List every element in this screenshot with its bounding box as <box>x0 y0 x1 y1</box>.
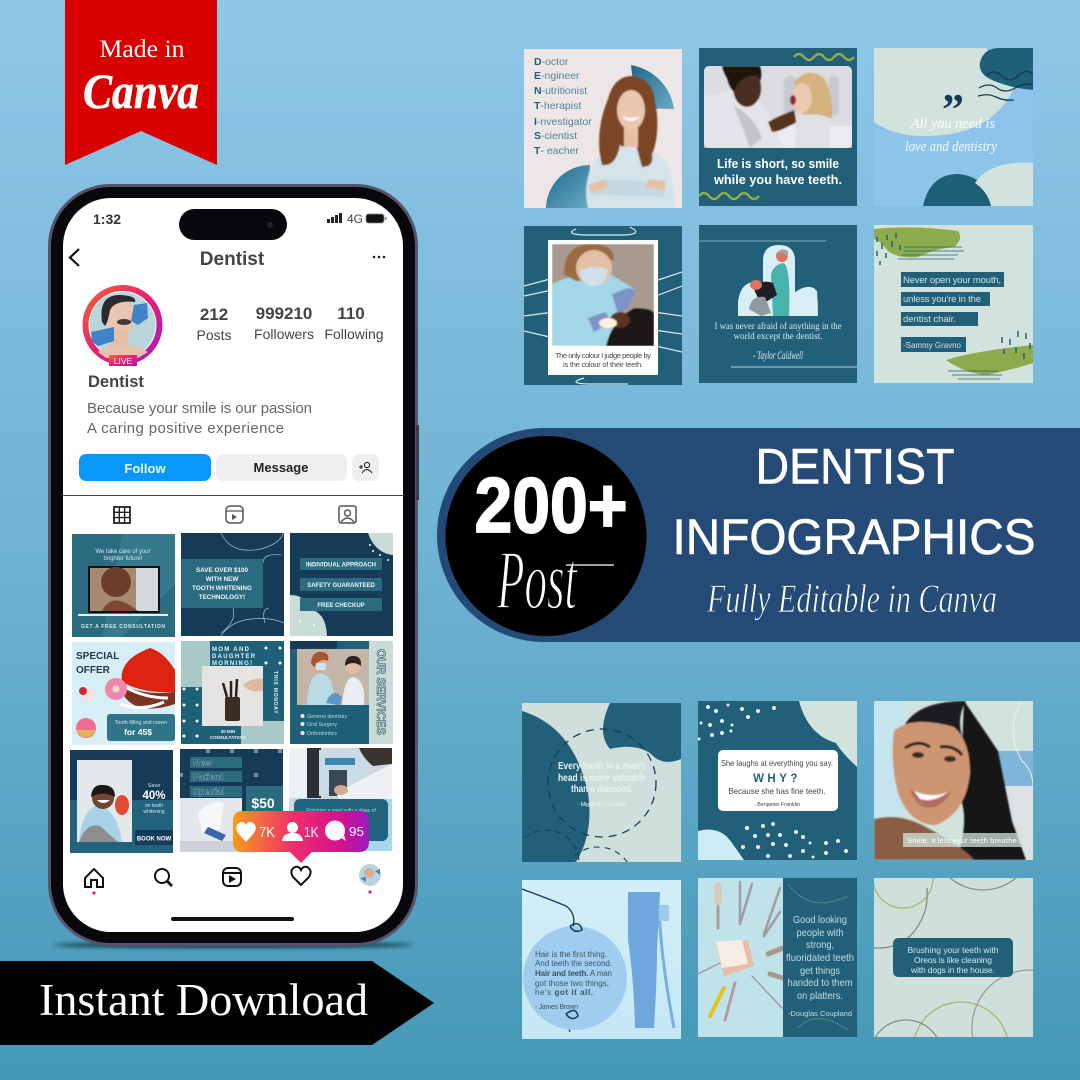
post 5: mom and daughter morning: THIS MONDAY <box>272 671 278 714</box>
post 5: mom and daughter morning: CONSULTATION! <box>210 735 247 740</box>
status bar: 1:32 <box>93 211 121 227</box>
tile: never open your mouth: Never open your mouth, <box>903 275 1001 286</box>
brush strokes bottom <box>946 345 1033 375</box>
tile: smiling woman photo <box>874 701 1033 860</box>
profile stats: Posts <box>196 327 232 343</box>
profile buttons <box>79 454 379 481</box>
tile: DENTIST acronym: T- eacher <box>534 145 579 157</box>
post 6: our services <box>290 641 393 744</box>
nav avatar <box>359 864 381 886</box>
badge: 200+ Post <box>446 436 646 636</box>
tile: Life is short <box>699 48 857 206</box>
post 7: save 40%: Save <box>148 783 160 789</box>
icon: toothpaste tube <box>628 892 660 1028</box>
tile: love and dentistry: All you need is <box>910 116 995 132</box>
post 7: save 40%: whitening <box>143 809 165 815</box>
tile: hair and teeth: he's got it all. <box>535 988 593 997</box>
post 9: dentist with x-ray <box>289 748 392 851</box>
post 7: save 40%: on teeth <box>145 803 163 809</box>
phone screen <box>63 198 403 932</box>
post 4: special offer: Tooth filling and crown <box>115 720 167 726</box>
post 5: mom and daughter morning: 30 MIN <box>221 729 235 734</box>
notification bubble: 7K <box>259 824 275 841</box>
post 7: save 40%: 40% <box>142 790 166 802</box>
tile: never open your mouth: unless you're in the <box>903 294 981 305</box>
heading: DENTIST: DENTIST <box>756 438 954 494</box>
tile: brushing with oreos: Oreos is like cleaning <box>914 955 992 965</box>
tile: good looking people: -Douglas Coupland <box>788 1009 852 1018</box>
profile header: Dentist <box>200 249 265 270</box>
profile bio: Dentist <box>88 373 144 391</box>
tile: every tooth: Every tooth in a man's <box>558 761 646 772</box>
post 8: new patient special: $50 <box>251 795 275 811</box>
ribbon: Made in Canva <box>65 0 217 165</box>
post 8: new patient special: New <box>193 758 213 768</box>
tile: Life is short: Life is short, so smile <box>717 157 839 171</box>
tile: every tooth: than a diamond. <box>571 784 633 795</box>
nav notification dots <box>92 890 372 895</box>
tile: DENTIST acronym: E-ngineer <box>534 70 580 82</box>
tile: brushing with oreos: Brushing your teeth with <box>908 945 999 955</box>
post 5: mom and daughter morning: MOM AND <box>212 647 250 653</box>
profile avatar <box>82 285 162 366</box>
icon: likes <box>236 822 256 842</box>
tile: why: - Benjamin Franklin <box>754 802 800 808</box>
post 3: individual approach <box>290 533 393 636</box>
post 2: tooth whitening: TECHNOLOGY! <box>199 594 245 601</box>
tile: why: Because she has fine teeth. <box>728 786 826 796</box>
profile tab icons <box>114 506 356 523</box>
tile: hair and teeth <box>522 880 681 1039</box>
tile: never open your mouth: dentist chair. <box>903 314 956 325</box>
status bar <box>93 209 386 240</box>
tile: every tooth <box>522 703 681 862</box>
post 7: save 40%: BOOK NOW <box>137 836 171 842</box>
post 2: tooth whitening <box>181 533 284 636</box>
icon: toothbrush <box>659 905 674 1028</box>
post 2: tooth whitening: TOOTH WHITENING <box>192 585 252 592</box>
tile: love and dentistry: ” <box>942 85 964 134</box>
profile bio: Because your smile is our passion <box>87 400 312 417</box>
post 3: individual approach: FREE CHECKUP <box>317 603 365 609</box>
banner <box>437 428 1080 642</box>
profile header <box>70 249 385 270</box>
post 8: new patient special: Patient <box>193 772 223 782</box>
quarter shape bottom <box>546 165 590 208</box>
ribbon label: Instant Download <box>39 975 368 1025</box>
badge: 200+ Post: Post <box>496 534 578 627</box>
brush strokes top <box>874 227 960 257</box>
tile: why: She laughs at everything you say. <box>721 758 833 768</box>
battery <box>366 214 384 223</box>
tile: afraid of the dentist: - Taylor Caldwell <box>753 348 803 362</box>
profile stats: 999210 <box>256 304 312 323</box>
bottom navigation icons <box>85 867 311 887</box>
dental tools <box>698 882 783 1020</box>
tile: DENTIST acronym: D-octor <box>534 56 569 68</box>
post 4: special offer <box>72 642 175 745</box>
badge: 200+ Post: 200+ <box>474 461 628 549</box>
tile: afraid of the dentist: world except the dentist. <box>734 331 822 341</box>
tile: DENTIST acronym: N-utritionist <box>534 85 587 97</box>
profile buttons: Follow <box>124 461 166 476</box>
tile: never open your mouth <box>874 225 1033 383</box>
panel: bottom post grid <box>513 701 1080 1080</box>
panel: top post grid <box>524 48 1033 385</box>
post 6: our services: General dentistry <box>307 714 348 720</box>
signal <box>327 213 342 223</box>
post 6: our services: OUR SERVICES <box>374 649 386 735</box>
profile avatar: LIVE <box>114 356 133 366</box>
tile: every tooth: - Miguel de Cervantes <box>578 802 626 808</box>
notification bubble <box>233 811 369 863</box>
home indicator <box>171 917 294 921</box>
tile: afraid of the dentist: I was never afraid of anything in the <box>714 321 842 331</box>
post 3: individual approach: SAFETY GUARANTEED <box>307 583 375 589</box>
tile: why <box>698 701 857 860</box>
post 8: new patient special <box>180 749 283 852</box>
post 2: tooth whitening: SAVE OVER $100 <box>196 567 249 574</box>
profile stats <box>196 304 384 343</box>
ribbon label: Canva: Canva <box>83 63 199 119</box>
tile: DENTIST acronym: T-herapist <box>534 100 581 112</box>
notification bubble: 95 <box>349 824 364 839</box>
profile buttons: Message <box>254 460 308 475</box>
tile: the only colour <box>524 226 682 385</box>
tile: never open your mouth: -Sammy Gravno <box>903 341 962 350</box>
post 8: new patient special: Special <box>193 786 225 796</box>
tile: DENTIST acronym <box>524 49 682 208</box>
post 7: save 40% <box>70 750 173 853</box>
tile: good looking people: strong, <box>806 939 834 951</box>
post 6: our services: Oral Surgery <box>307 722 337 728</box>
tile: brushing with oreos <box>874 878 1033 1037</box>
tile: love and dentistry: love and dentistry <box>905 139 997 155</box>
tile: good looking people: get things <box>800 965 840 977</box>
post 5: mom and daughter morning: MORNING! <box>212 661 253 667</box>
tile: afraid of the dentist <box>699 225 857 383</box>
post 6: our services: Orthodontics <box>307 731 337 737</box>
post 1: free consultation: GET A FREE CONSULTATION <box>81 624 165 630</box>
quarter shape top <box>631 65 674 109</box>
tile: hair and teeth: Hair and teeth. A man <box>535 969 612 978</box>
tile: smiling woman photo: Smile, it lets your teeth breathe. <box>907 836 1019 845</box>
tile: DENTIST acronym: I-nvestigator <box>534 116 592 128</box>
tile: Life is short: while you have teeth. <box>713 173 842 187</box>
ribbon label: Made in: Made in <box>100 36 185 63</box>
post 1: free consultation: brighter future! <box>103 556 143 562</box>
phone mockup <box>48 184 419 948</box>
icon: followers <box>282 833 303 841</box>
tile: hair and teeth: got those two things, <box>535 979 609 988</box>
post 1: free consultation <box>72 534 175 637</box>
tile: the only colour: is the colour of their teeth. <box>563 360 643 369</box>
status bar: 4G <box>347 212 363 226</box>
profile bio: A caring positive experience <box>87 420 284 437</box>
post 2: tooth whitening: WITH NEW <box>206 576 238 583</box>
tile: good looking people: Good looking <box>793 914 847 926</box>
profile stats: 110 <box>337 304 365 323</box>
post 4: special offer: SPECIAL <box>76 651 119 662</box>
tile: the only colour: The only colour I judge people by <box>555 351 651 360</box>
tile: every tooth: head is more valuable <box>558 773 646 784</box>
post 5: mom and daughter morning <box>181 641 284 744</box>
profile stats: 212 <box>200 305 228 324</box>
post 9: dentist with x-ray: Finishing a meal with a glass of <box>306 808 376 814</box>
post 3: individual approach: INDIVIDUAL APPROACH <box>306 562 376 568</box>
notification bubble: 1K <box>304 824 318 841</box>
live badge <box>109 355 137 366</box>
tile: good looking people <box>698 878 857 1037</box>
dynamic island <box>179 209 287 240</box>
illustration: dentist and patient <box>738 245 818 316</box>
phone shadow <box>53 942 413 948</box>
tile: hair and teeth: - James Brown <box>535 1004 578 1011</box>
tile: DENTIST acronym: S-cientist <box>534 130 577 142</box>
phone body <box>48 184 418 946</box>
post 4: special offer: for 45$ <box>124 727 152 737</box>
post 4: special offer: OFFER <box>76 665 111 676</box>
profile stats: Followers <box>254 326 314 342</box>
tile: hair and teeth: And teeth the second. <box>535 959 612 968</box>
profile stats: Following <box>324 326 384 342</box>
tile: why: WHY? <box>753 773 801 785</box>
tile: love and dentistry <box>874 48 1033 206</box>
tile: brushing with oreos: with dogs in the house. <box>910 965 995 975</box>
heading: INFOGRAPHICS: INFOGRAPHICS <box>672 509 1036 565</box>
post 5: mom and daughter morning: DAUGHTER <box>212 654 256 660</box>
post 1: free consultation: We take care of your <box>95 549 151 555</box>
tile: good looking people: people with <box>796 927 844 939</box>
ribbon: Instant Download <box>0 961 434 1045</box>
icon: comments <box>325 820 345 840</box>
banner background <box>437 428 1080 642</box>
profile bio <box>87 373 312 437</box>
tile: hair and teeth: Hair is the first thing. <box>535 950 607 959</box>
tile: good looking people: on platters. <box>797 990 843 1002</box>
